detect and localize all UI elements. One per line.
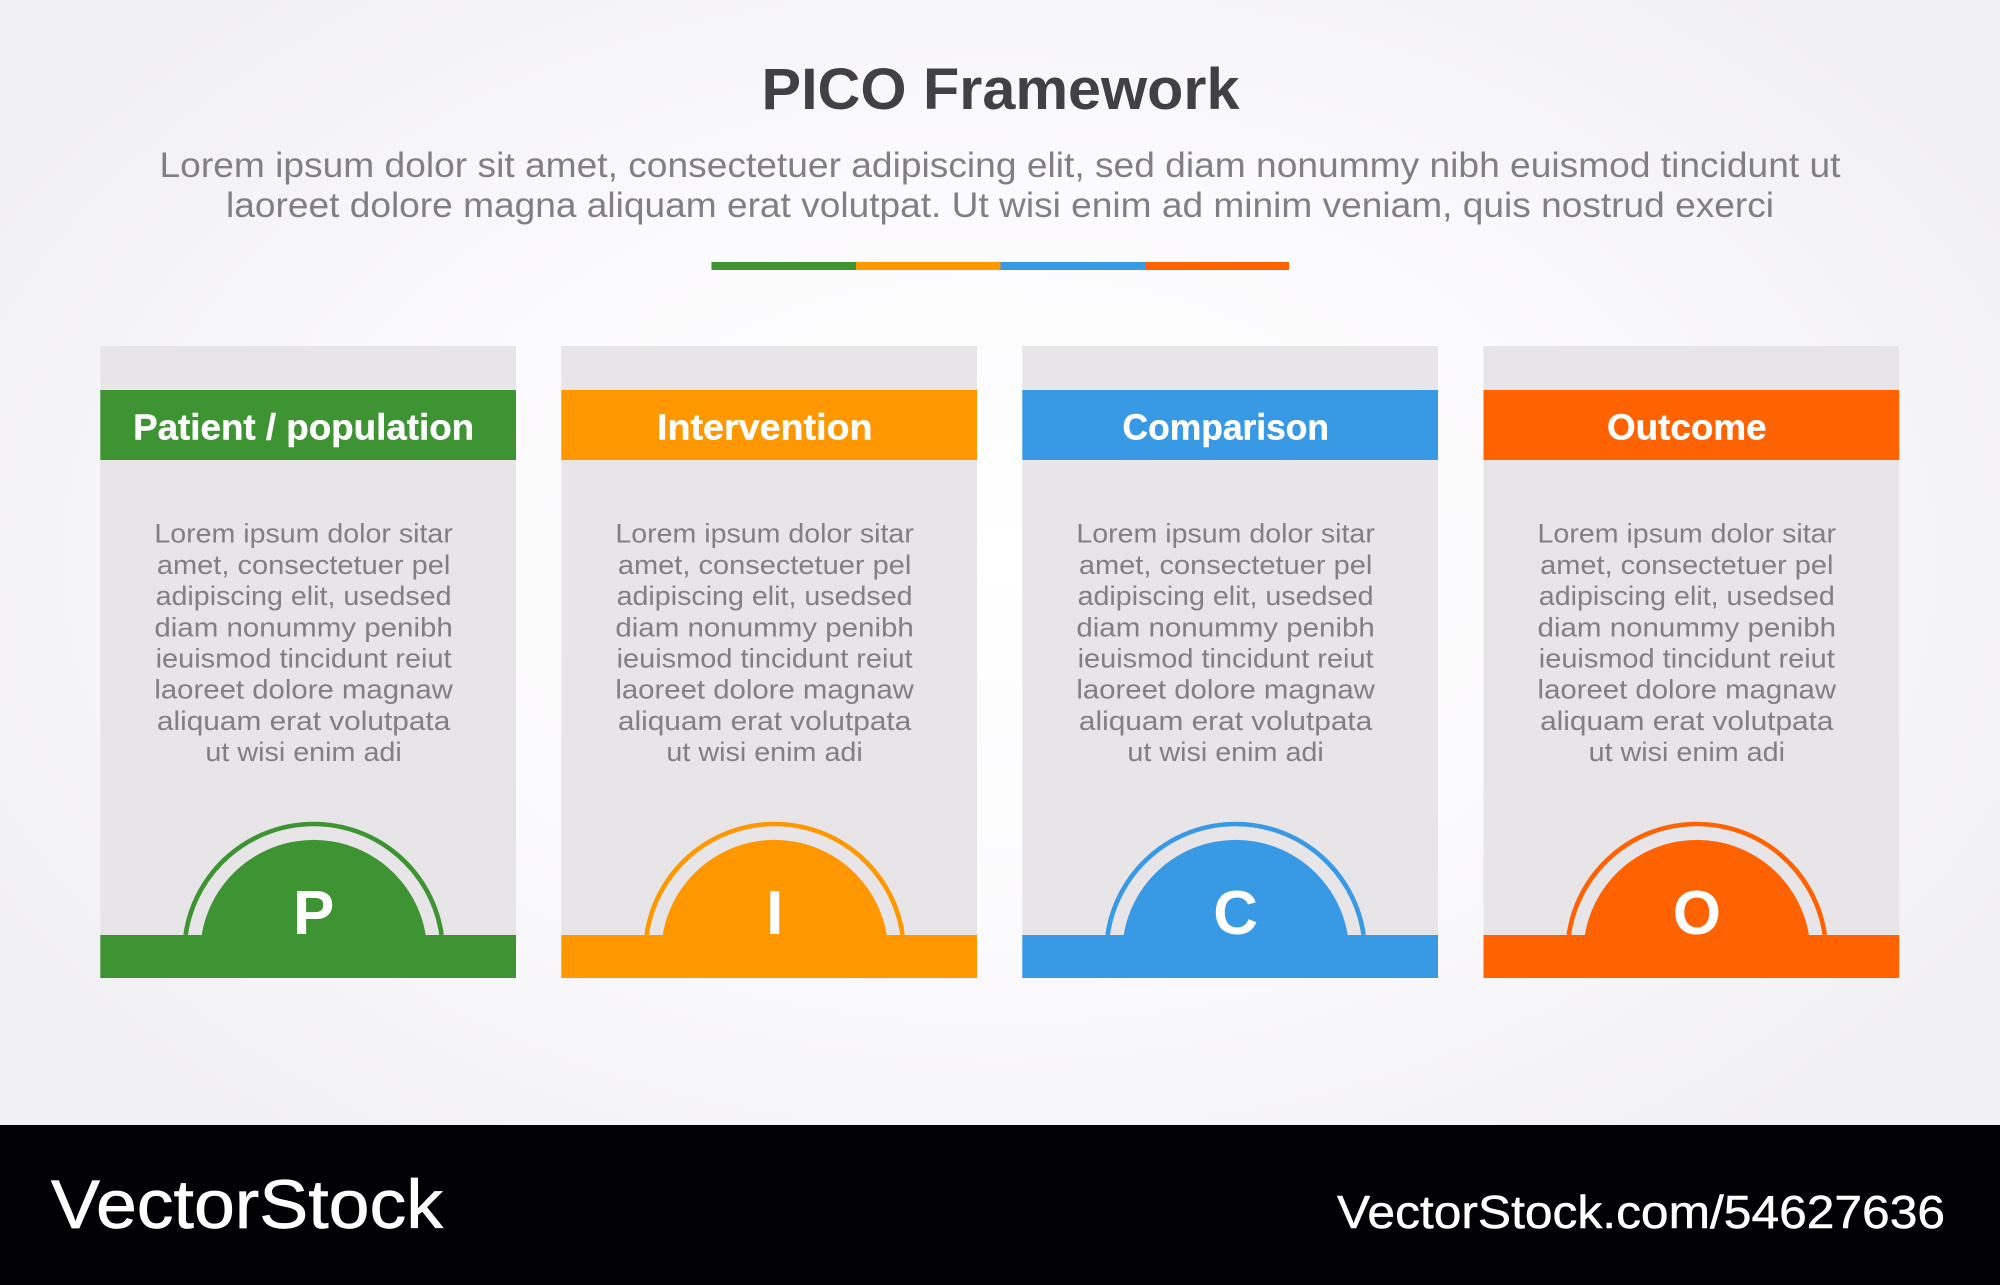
body text — [615, 519, 914, 767]
body text: Lorem ipsum dolor sitar — [154, 519, 453, 549]
badge: O — [1569, 824, 1825, 948]
body text: laoreet dolore magnaw — [1076, 675, 1375, 705]
footer bar — [561, 935, 977, 978]
panel: intervention — [561, 346, 977, 978]
body text: diam nonummy penibh — [615, 612, 914, 642]
watermark footer — [0, 1125, 2000, 1285]
header: comparison: Comparison — [1123, 406, 1329, 447]
badge: I: I — [766, 879, 783, 948]
header: outcome: Outcome — [1607, 406, 1767, 447]
panel: comparison — [1022, 346, 1438, 978]
subtitle — [160, 146, 1841, 225]
footer bar — [1022, 935, 1438, 978]
body text: laoreet dolore magnaw — [1538, 675, 1837, 705]
body text: adipiscing elit, usedsed — [156, 581, 452, 611]
body text: amet, consectetuer pel — [157, 550, 450, 580]
body text — [1538, 519, 1837, 767]
body text: Lorem ipsum dolor sitar — [1076, 519, 1375, 549]
header: outcome — [1484, 390, 1899, 460]
body text: ieuismod tincidunt reiut — [156, 644, 452, 674]
body text: aliquam erat volutpata — [157, 706, 451, 736]
body text: amet, consectetuer pel — [618, 550, 911, 580]
header: intervention — [561, 390, 977, 460]
image url: VectorStock.com/54627636 — [1337, 1186, 1945, 1238]
brand wordmark: VectorStock — [51, 1166, 444, 1243]
badge: P: P — [293, 879, 334, 948]
body text: Lorem ipsum dolor sitar — [615, 519, 914, 549]
colour divider bar — [712, 262, 1289, 270]
body text: ieuismod tincidunt reiut — [1078, 644, 1374, 674]
body text — [1076, 519, 1375, 767]
badge: P — [186, 824, 442, 948]
body text: aliquam erat volutpata — [1540, 706, 1835, 736]
badge: O: O — [1673, 879, 1721, 948]
body text — [154, 519, 453, 767]
body text: aliquam erat volutpata — [1079, 706, 1373, 736]
header: patient / population — [100, 390, 516, 460]
body text: laoreet dolore magnaw — [615, 675, 914, 705]
header: intervention: Intervention — [657, 406, 873, 447]
footer bar — [100, 935, 516, 978]
body text: adipiscing elit, usedsed — [1078, 581, 1374, 611]
body text: ut wisi enim adi — [205, 737, 402, 767]
body text: Lorem ipsum dolor sitar — [1538, 519, 1836, 549]
body text: adipiscing elit, usedsed — [617, 581, 913, 611]
footer bar — [1484, 935, 1899, 978]
body text: adipiscing elit, usedsed — [1539, 581, 1835, 611]
body text: amet, consectetuer pel — [1079, 550, 1372, 580]
subtitle: laoreet dolore magna aliquam erat volutpat. Ut wisi enim ad minim veniam, quis nostrud exerci — [226, 186, 1774, 225]
panel: patient / population — [100, 346, 516, 978]
body text: ut wisi enim adi — [1589, 737, 1785, 767]
body text: diam nonummy penibh — [1076, 612, 1375, 642]
body text: laoreet dolore magnaw — [154, 675, 453, 705]
header: patient / population: Patient / population — [133, 406, 474, 447]
body text: diam nonummy penibh — [1538, 612, 1836, 642]
header: comparison — [1022, 390, 1438, 460]
badge: C — [1108, 824, 1364, 948]
body text: diam nonummy penibh — [154, 612, 453, 642]
body text: aliquam erat volutpata — [618, 706, 912, 736]
body text: ut wisi enim adi — [666, 737, 863, 767]
body text: ieuismod tincidunt reiut — [617, 644, 913, 674]
body text: ut wisi enim adi — [1127, 737, 1324, 767]
panel: outcome — [1484, 346, 1899, 978]
title: PICO Framework — [762, 57, 1240, 122]
body text: ieuismod tincidunt reiut — [1539, 644, 1835, 674]
subtitle: Lorem ipsum dolor sit amet, consectetuer adipiscing elit, sed diam nonummy nibh euismod tincidunt ut — [160, 146, 1841, 185]
badge: C: C — [1213, 879, 1258, 948]
badge: I — [647, 824, 903, 948]
body text: amet, consectetuer pel — [1540, 550, 1834, 580]
